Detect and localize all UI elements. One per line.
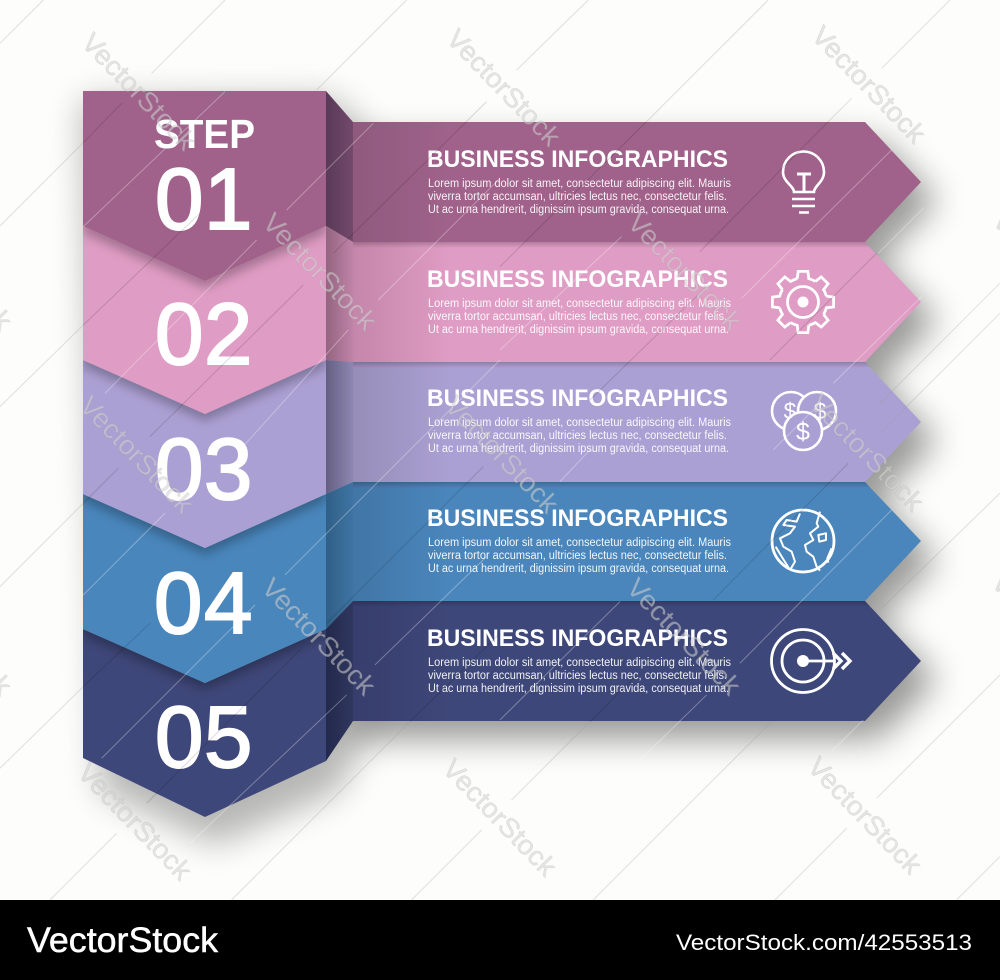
icon: coins: $ [796,418,810,446]
step column chevrons [83,91,326,817]
text block: ribbon 5: Ut ac urna hendrerit, dignissim ipsum gravida, consequat urna. [428,683,729,695]
number 02: 02 [155,286,252,383]
text block: ribbon 5 [427,625,731,695]
watermarks: VectorStock [806,20,932,149]
ribbon 1 mauve [353,122,921,242]
text block: ribbon 3 [427,385,731,455]
icon: light bulb [783,152,824,212]
watermarks: VectorStock [439,390,565,519]
text block: ribbon 4: Lorem ipsum dolor sit amet, consectetur adipiscing elit. Mauris [428,537,731,549]
column labels [154,111,255,786]
watermarks: VectorStock [257,207,383,336]
text block: ribbon 3: BUSINESS INFOGRAPHICS [427,385,728,412]
watermarks: VectorStock [622,207,748,336]
fold panel between column and ribbons [326,91,353,761]
watermarks: VectorStock [804,388,930,517]
icon: coins: $ [814,398,827,424]
heading: STEP: STEP [154,111,255,157]
icon: gear [772,271,834,333]
text block: ribbon 5: viverra tortor accumsan, ultricies lectus nec, consectetur felis. [428,670,727,682]
ribbon 2 pink [353,242,921,362]
ribbon 4 blue [353,482,921,601]
text block: ribbon 4: Ut ac urna hendrerit, dignissim ipsum gravida, consequat urna. [428,563,729,575]
text block: ribbon 3: viverra tortor accumsan, ultricies lectus nec, consectetur felis. [428,430,727,442]
footer bar [0,900,1000,980]
footer logo text: VectorStock [27,921,219,960]
number 03: 03 [155,421,252,518]
watermarks: VectorStock [72,757,198,886]
text block: ribbon 2: Lorem ipsum dolor sit amet, consectetur adipiscing elit. Mauris [428,298,731,310]
text block: ribbon 1: Ut ac urna hendrerit, dignissim ipsum gravida, consequat urna. [428,204,729,216]
text block: ribbon 1 [427,146,731,216]
text block: ribbon 2: viverra tortor accumsan, ultricies lectus nec, consectetur felis. [428,311,727,323]
text block: ribbon 4 [427,505,731,575]
text block: ribbon 1: Lorem ipsum dolor sit amet, consectetur adipiscing elit. Mauris [428,178,731,190]
text block: ribbon 2: Ut ac urna hendrerit, dignissim ipsum gravida, consequat urna. [428,324,729,336]
ribbon 3 lavender [353,362,921,482]
ribbon 5 navy [353,601,921,721]
text block: ribbon 2 [427,266,731,336]
watermarks: VectorStock [74,390,200,519]
number 04: 04 [154,555,252,652]
watermarks: VectorStock [802,751,928,880]
text block: ribbon 5: BUSINESS INFOGRAPHICS [427,625,728,652]
footer image id: VectorStock.com/42553513 [676,930,972,955]
text block: ribbon 3: Ut ac urna hendrerit, dignissim ipsum gravida, consequat urna. [428,443,729,455]
number 05: 05 [155,689,252,786]
icon: coins [772,392,836,450]
watermarks: VectorStock [256,572,382,701]
text block: ribbon 4: viverra tortor accumsan, ultricies lectus nec, consectetur felis. [428,550,727,562]
text block: ribbon 2: BUSINESS INFOGRAPHICS [427,266,728,293]
drop shadows [82,98,937,845]
icon: globe [772,510,834,572]
text block: ribbon 3: Lorem ipsum dolor sit amet, consectetur adipiscing elit. Mauris [428,417,731,429]
icon: target with arrow [772,630,850,692]
watermarks: VectorStock [441,23,567,152]
icon: coins: $ [784,398,797,424]
text block: ribbon 4: BUSINESS INFOGRAPHICS [427,505,728,532]
text block: ribbon 1: viverra tortor accumsan, ultricies lectus nec, consectetur felis. [428,191,727,203]
watermarks: VectorStock [621,572,747,701]
number 01: 01 [155,151,252,248]
watermarks: VectorStock [437,753,563,882]
watermarks: VectorStock [76,27,202,156]
text block: ribbon 1: BUSINESS INFOGRAPHICS [427,146,728,173]
text block: ribbon 5: Lorem ipsum dolor sit amet, consectetur adipiscing elit. Mauris [428,657,731,669]
